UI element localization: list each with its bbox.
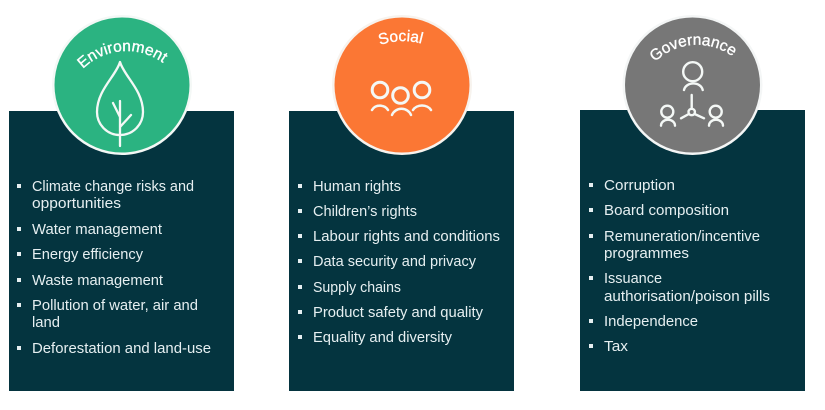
list: social factors: Product safety and quality	[313, 305, 484, 321]
panel: social	[289, 111, 514, 391]
list: social factors: Supply chains	[313, 280, 401, 296]
list: governance factors: Board composition	[604, 203, 729, 219]
list: environment factors: Energy efficiency	[32, 247, 144, 263]
list: environment factors: Waste management	[32, 273, 163, 289]
list: social factors: Children’s rights	[313, 204, 417, 220]
badge: social	[332, 15, 472, 155]
list: environment factors: land	[32, 315, 60, 331]
list: governance factors	[589, 178, 770, 355]
heading: Social: Social	[378, 30, 424, 44]
list: environment factors: Deforestation and land-use	[32, 341, 211, 357]
list: environment factors: Water management	[32, 222, 162, 238]
list: governance factors: authorisation/poison pills	[604, 289, 770, 305]
panel: governance	[580, 110, 805, 391]
list: social factors: Human rights	[313, 179, 401, 195]
badge: governance	[622, 15, 762, 155]
list: environment factors	[17, 179, 211, 357]
badge: environment	[52, 15, 192, 155]
list: governance factors: programmes	[604, 246, 689, 262]
list: governance factors: Corruption	[604, 178, 675, 194]
list: governance factors: Remuneration/incentive	[604, 229, 760, 245]
panel: environment	[9, 111, 234, 391]
list: social factors: Equality and diversity	[313, 330, 453, 346]
list: environment factors: opportunities	[32, 196, 121, 212]
icon: leaf	[97, 62, 143, 146]
heading: Environment: Environment	[76, 42, 168, 68]
list: governance factors: Issuance	[604, 271, 662, 287]
list: governance factors: Tax	[604, 339, 629, 355]
list: environment factors: Pollution of water, air and	[32, 298, 198, 314]
heading: Governance: Governance	[650, 36, 736, 60]
list: governance factors: Independence	[604, 314, 698, 330]
list: social factors: Data security and privacy	[313, 254, 477, 270]
icon: governance hierarchy	[661, 62, 723, 126]
icon: group of people	[372, 82, 431, 115]
list: social factors	[298, 179, 500, 346]
list: social factors: Labour rights and conditions	[313, 229, 500, 245]
list: environment factors: Climate change risks and	[32, 179, 194, 195]
